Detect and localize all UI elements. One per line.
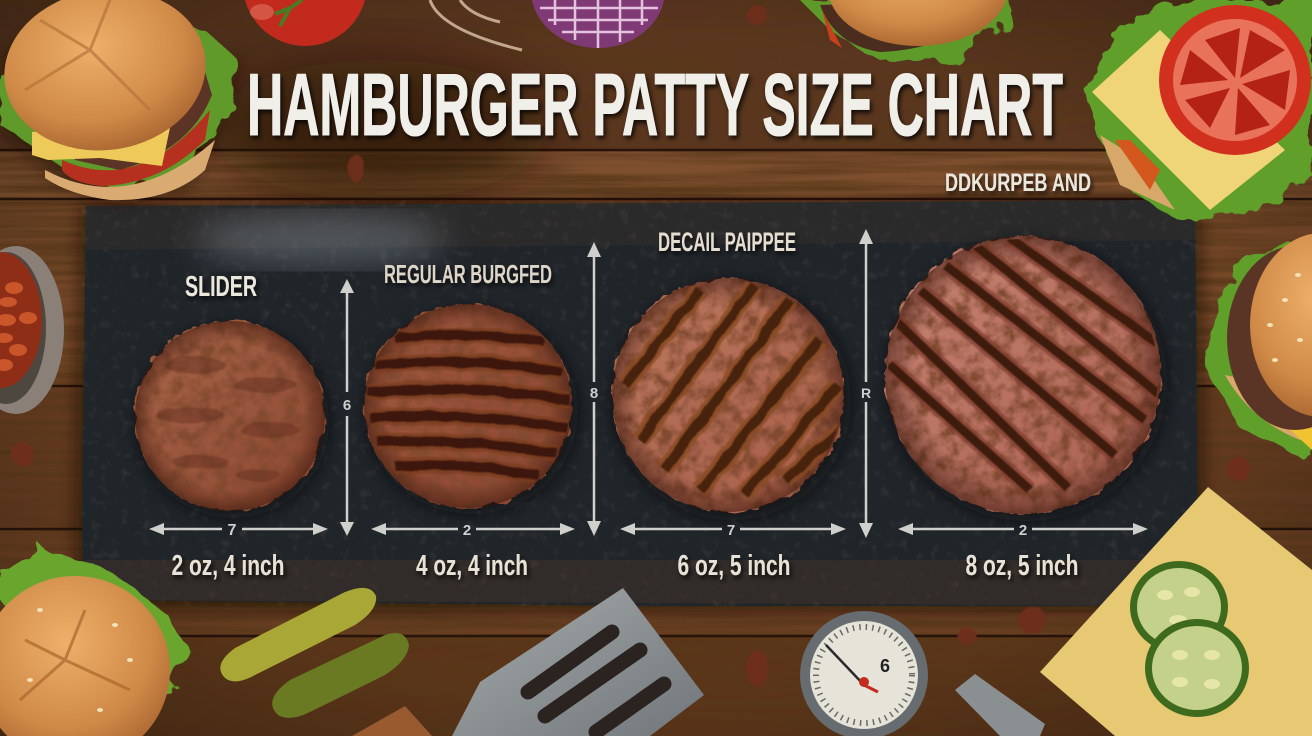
icon: thermometer dial: 6 (880, 656, 890, 676)
icon: spatula (352, 588, 704, 736)
arrow: width 6 oz (620, 522, 846, 539)
size label: 2 oz: 2 oz, 4 inch (172, 550, 284, 582)
arrow: width regular (371, 522, 575, 539)
patty label: slider: SLIDER (185, 271, 257, 303)
burger: top right with tomato (1085, 0, 1312, 222)
burger: top left (0, 0, 240, 205)
size label: 4 oz: 4 oz, 4 inch (416, 550, 528, 582)
patty: 8 oz (885, 236, 1167, 521)
arrow: width 6 oz: 7 (727, 522, 735, 539)
shadow of slate board (75, 200, 1205, 610)
size label: 6 oz: 6 oz, 5 inch (678, 550, 790, 582)
arrow: vertical height 2 (587, 242, 601, 536)
icon: cheese and pickle slices (1040, 487, 1312, 736)
burger: bottom left (0, 545, 188, 736)
arrow: vertical height 3: R (861, 385, 871, 401)
patty: regular 4 oz (364, 304, 578, 514)
icon: tomato (243, 0, 367, 46)
arrow: vertical height 2: 8 (590, 385, 598, 402)
burger: top center (800, 0, 1010, 62)
arrow: width slider (149, 522, 328, 539)
icon: bowl of beans (0, 246, 64, 414)
arrow: width regular: 2 (463, 522, 471, 539)
icon: thermometer dial (800, 611, 928, 736)
size label: 8 oz: 8 oz, 5 inch (966, 550, 1078, 582)
panel: slate board (82, 200, 1198, 606)
arrow: vertical height 3 (859, 229, 873, 538)
arrow: width 8 oz (898, 522, 1148, 539)
patty: 6 oz (612, 278, 851, 520)
icon: onion and wire (430, 0, 665, 50)
icon: tongs clip (955, 674, 1045, 736)
patty: slider 2 oz (135, 321, 329, 518)
patty label: third size: DECAIL PAIPPEE (658, 227, 796, 257)
arrow: width 8 oz: 2 (1019, 522, 1027, 539)
patty label: regular: REGULAR BURGFED (384, 259, 552, 289)
burger: right side (1208, 233, 1312, 456)
arrow: vertical height 1 (340, 279, 354, 536)
icon: pickle spears (220, 588, 409, 718)
subtitle label: DDKURPEB AND (945, 169, 1091, 197)
arrow: width slider: 7 (228, 522, 237, 539)
arrow: vertical height 1: 6 (343, 397, 351, 414)
